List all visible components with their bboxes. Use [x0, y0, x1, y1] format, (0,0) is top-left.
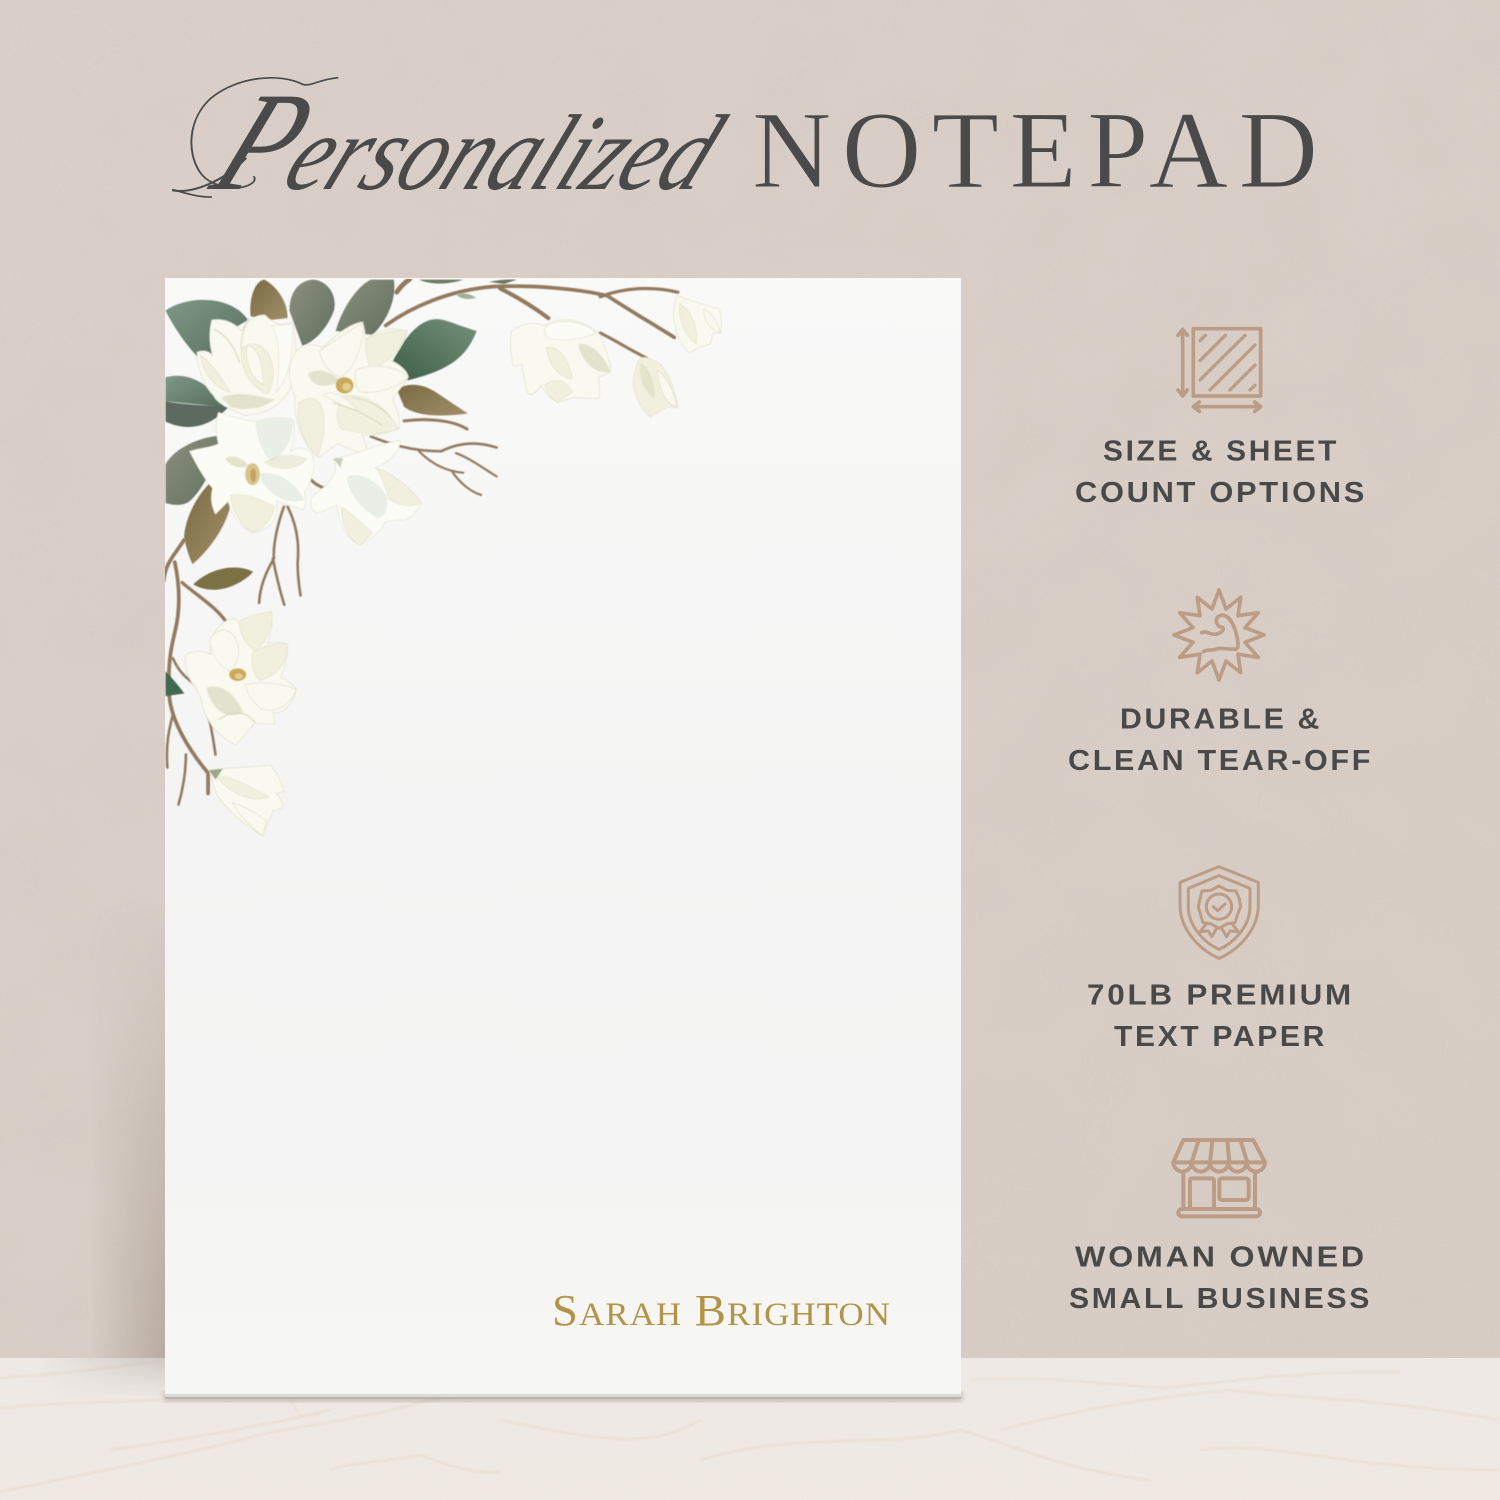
feature: size and sheet count [1075, 329, 1367, 509]
label: woman owned business: SMALL BUSINESS [1069, 1283, 1372, 1315]
label: premium paper [1087, 980, 1354, 1053]
label: woman owned business: WOMAN OWNED [1075, 1242, 1367, 1274]
flower: lower left bloom [190, 412, 314, 533]
marble floor [0, 1358, 1500, 1500]
feature: woman owned business [1069, 1140, 1372, 1315]
label: durable tear-off: CLEAN TEAR-OFF [1068, 745, 1373, 777]
branches [164, 279, 678, 805]
title serif word: NOTEPAD [752, 89, 1318, 211]
flower: upper centre bloom [289, 322, 409, 457]
notepad [164, 278, 962, 1401]
flower: left middle bloom [185, 612, 296, 745]
flower: small right bud [633, 357, 678, 417]
floral corner illustration [164, 279, 721, 836]
label: durable tear-off: DURABLE & [1120, 704, 1322, 736]
label: durable tear-off [1068, 704, 1373, 777]
flower: bottom bud [209, 766, 284, 836]
flower: top centre bloom [510, 320, 611, 402]
flower: lower centre bud [311, 440, 422, 546]
label: premium paper: 70LB PREMIUM [1087, 980, 1354, 1012]
title [173, 63, 1318, 220]
title script word: Personalized [193, 63, 753, 220]
flower: top right bud [673, 295, 721, 353]
icon: shield with award badge [1180, 867, 1258, 958]
icon: storefront [1173, 1140, 1265, 1216]
feature: durable tear-off [1068, 590, 1373, 777]
label: size and sheet count: SIZE & SHEET [1103, 436, 1339, 468]
magnolia blooms [185, 295, 721, 836]
personalized name: SARAH BRIGHTON [552, 1286, 891, 1335]
label: woman owned business [1069, 1242, 1372, 1315]
icon: bicep in sunburst [1174, 590, 1264, 680]
wall background [96, 956, 165, 1358]
feature: premium paper [1087, 867, 1354, 1053]
leaves [166, 279, 517, 696]
flower: upper left bloom [197, 315, 296, 415]
icon: size ruler square [1178, 329, 1261, 411]
label: size and sheet count: COUNT OPTIONS [1075, 477, 1367, 509]
label: size and sheet count [1075, 436, 1367, 509]
label: premium paper: TEXT PAPER [1114, 1021, 1327, 1053]
